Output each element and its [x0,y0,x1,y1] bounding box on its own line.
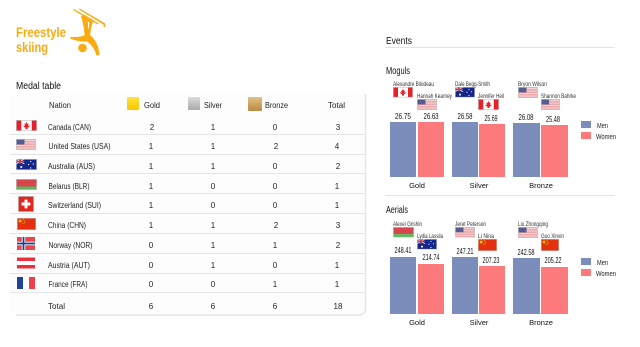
table header [49,97,345,111]
row: Total [48,302,343,311]
row: Total: 6 [211,302,216,311]
category labels: Gold [409,318,425,327]
athlete: Guo Xinxin: Guo Xinxin [541,233,564,240]
table header: Gold [144,101,160,110]
table header: Silver [204,101,222,110]
row: Australia: 1 [149,162,154,171]
athlete: Jennifer Heil [478,93,504,110]
row: France: 0 [211,280,216,289]
athlete: Alexandre Bilodeau: Alexandre Bilodeau [393,81,434,88]
athlete: Dale Begg-Smith [455,81,490,98]
legend: Women [596,269,616,278]
panel: Moguls chart [386,66,616,190]
row: Canada: 1 [211,123,216,132]
athlete: Guo Xinxin [541,233,564,251]
row: China: 1 [211,221,216,230]
athlete: Liu Zhongqing: Liu Zhongqing [518,221,548,228]
row: Austria: 0 [273,261,278,270]
bar values: 26.63 [424,112,439,121]
row: Australia: 1 [211,162,216,171]
row: China: 3 [336,221,341,230]
row: France: 1 [335,280,340,289]
row: China: China (CHN) [48,221,86,230]
row: United States: 1 [211,142,216,151]
legend: Women [596,132,616,141]
row: Australia [16,159,341,171]
row: Austria: 1 [211,261,216,270]
athlete: Alexei Grishin: Alexei Grishin [393,221,422,228]
athlete: Bryon Wilson: Bryon Wilson [518,81,547,88]
row: France: 0 [149,280,154,289]
row: Canada: 3 [336,123,341,132]
row: United States [16,139,340,151]
row: United States: 1 [149,142,154,151]
bar values: 26.08 [518,113,534,122]
heading: Events: Events [386,36,412,47]
row: France: 1 [273,280,278,289]
row: Canada: 2 [150,123,155,132]
athlete: Li Nina [478,233,497,251]
bar values [395,112,560,124]
row: China: 2 [274,221,279,230]
row: Austria: 0 [149,261,154,270]
athlete: Hannah Kearney [417,93,453,110]
row: Norway: Norway (NOR) [48,241,93,250]
category labels: Bronze [529,318,553,327]
table header: Total [328,101,345,110]
bar values [394,246,562,265]
legend: Men [597,258,608,267]
row: Austria: 1 [335,261,340,270]
row: Total: 6 [273,302,278,311]
row: France [17,277,340,289]
icon: freestyle skier [70,8,105,56]
category labels: Silver [470,181,489,190]
bar values: 247.21 [456,247,474,256]
bar values: 242.58 [518,248,535,257]
row: France: France (FRA) [48,280,88,289]
row: Norway: 0 [149,241,154,250]
row: Australia: Australia (AUS) [48,162,95,171]
row: Switzerland: 1 [149,201,154,210]
table header: Bronze [265,101,288,110]
bar values: 205.22 [544,256,562,265]
row: Switzerland: 0 [211,201,216,210]
row: Austria [17,257,340,270]
table panel background [10,94,365,314]
category labels: Silver [470,318,489,327]
athlete: Bryon Wilson [518,81,547,98]
row: Canada [16,120,341,132]
athlete: Li Nina: Li Nina [478,233,494,240]
row: Switzerland: Switzerland (SUI) [48,201,101,210]
athlete: Shannon Bahrke [541,93,576,110]
title: Freestyle skiing [16,25,66,55]
category labels [409,181,553,190]
bar values: 248.41 [394,246,412,255]
athlete: Liu Zhongqing [518,221,548,238]
athlete: Alexei Grishin [393,221,422,238]
category labels [409,318,553,327]
title: Freestyle skiing: skiing [16,40,48,55]
row: Switzerland: 0 [273,201,278,210]
athlete: Jennifer Heil: Jennifer Heil [478,93,504,100]
heading: Aerials: Aerials [386,205,408,216]
legend: Men [597,121,608,130]
panel: medal table [10,94,366,315]
bar values: 25.69 [484,114,498,123]
row: Total: Total [48,302,65,311]
athlete: Jeret Peterson [455,221,486,238]
row: Belarus: 1 [149,182,154,191]
athlete: Lydia Lassila: Lydia Lassila [417,233,443,240]
row: China [17,218,341,230]
athlete: Dale Begg-Smith: Dale Begg-Smith [455,81,490,88]
bars [390,257,568,314]
row: Canada: Canada (CAN) [48,123,91,132]
bar values: 26.58 [458,112,473,121]
row: Canada: 0 [273,123,278,132]
row: Belarus [16,179,340,191]
row: Norway [17,237,341,250]
athlete: Shannon Bahrke: Shannon Bahrke [541,93,576,100]
bars [390,122,568,177]
row: Australia: 2 [336,162,341,171]
bar values: 214.74 [422,253,440,262]
athlete: Alexandre Bilodeau [393,81,434,98]
heading: Medal table: Medal table [16,81,61,92]
row: United States: 2 [274,142,279,151]
athlete: Lydia Lassila [417,233,443,250]
bar values: 207.23 [482,256,500,265]
table header: Nation [49,101,71,110]
athlete: Hannah Kearney: Hannah Kearney [417,93,453,100]
row: Norway: 2 [336,241,341,250]
legend [581,258,616,278]
legend [581,121,616,141]
row: Switzerland [18,196,340,212]
row: Belarus: 0 [211,182,216,191]
row: United States: 4 [335,142,340,151]
athlete: Jeret Peterson: Jeret Peterson [455,221,486,228]
category labels: Gold [409,181,425,190]
panel: Aerials chart [386,205,616,327]
row: Austria: Austria (AUT) [48,261,90,270]
bar values: 25.48 [546,115,560,124]
row: Norway: 1 [273,241,278,250]
bar values: 26.75 [395,112,411,121]
row: Belarus: Belarus (BLR) [48,182,90,191]
category labels: Bronze [529,181,553,190]
row: Total: 6 [149,302,154,311]
row: Belarus: 1 [335,182,340,191]
row: China: 1 [149,221,154,230]
row: Australia: 0 [273,162,278,171]
row: Norway: 1 [211,241,216,250]
row: Switzerland: 1 [335,201,340,210]
title: Freestyle skiing: Freestyle [16,25,66,40]
heading: Moguls: Moguls [386,66,410,77]
row: Total: 18 [334,302,343,311]
row: United States: United States (USA) [48,142,111,151]
row: Belarus: 0 [273,182,278,191]
